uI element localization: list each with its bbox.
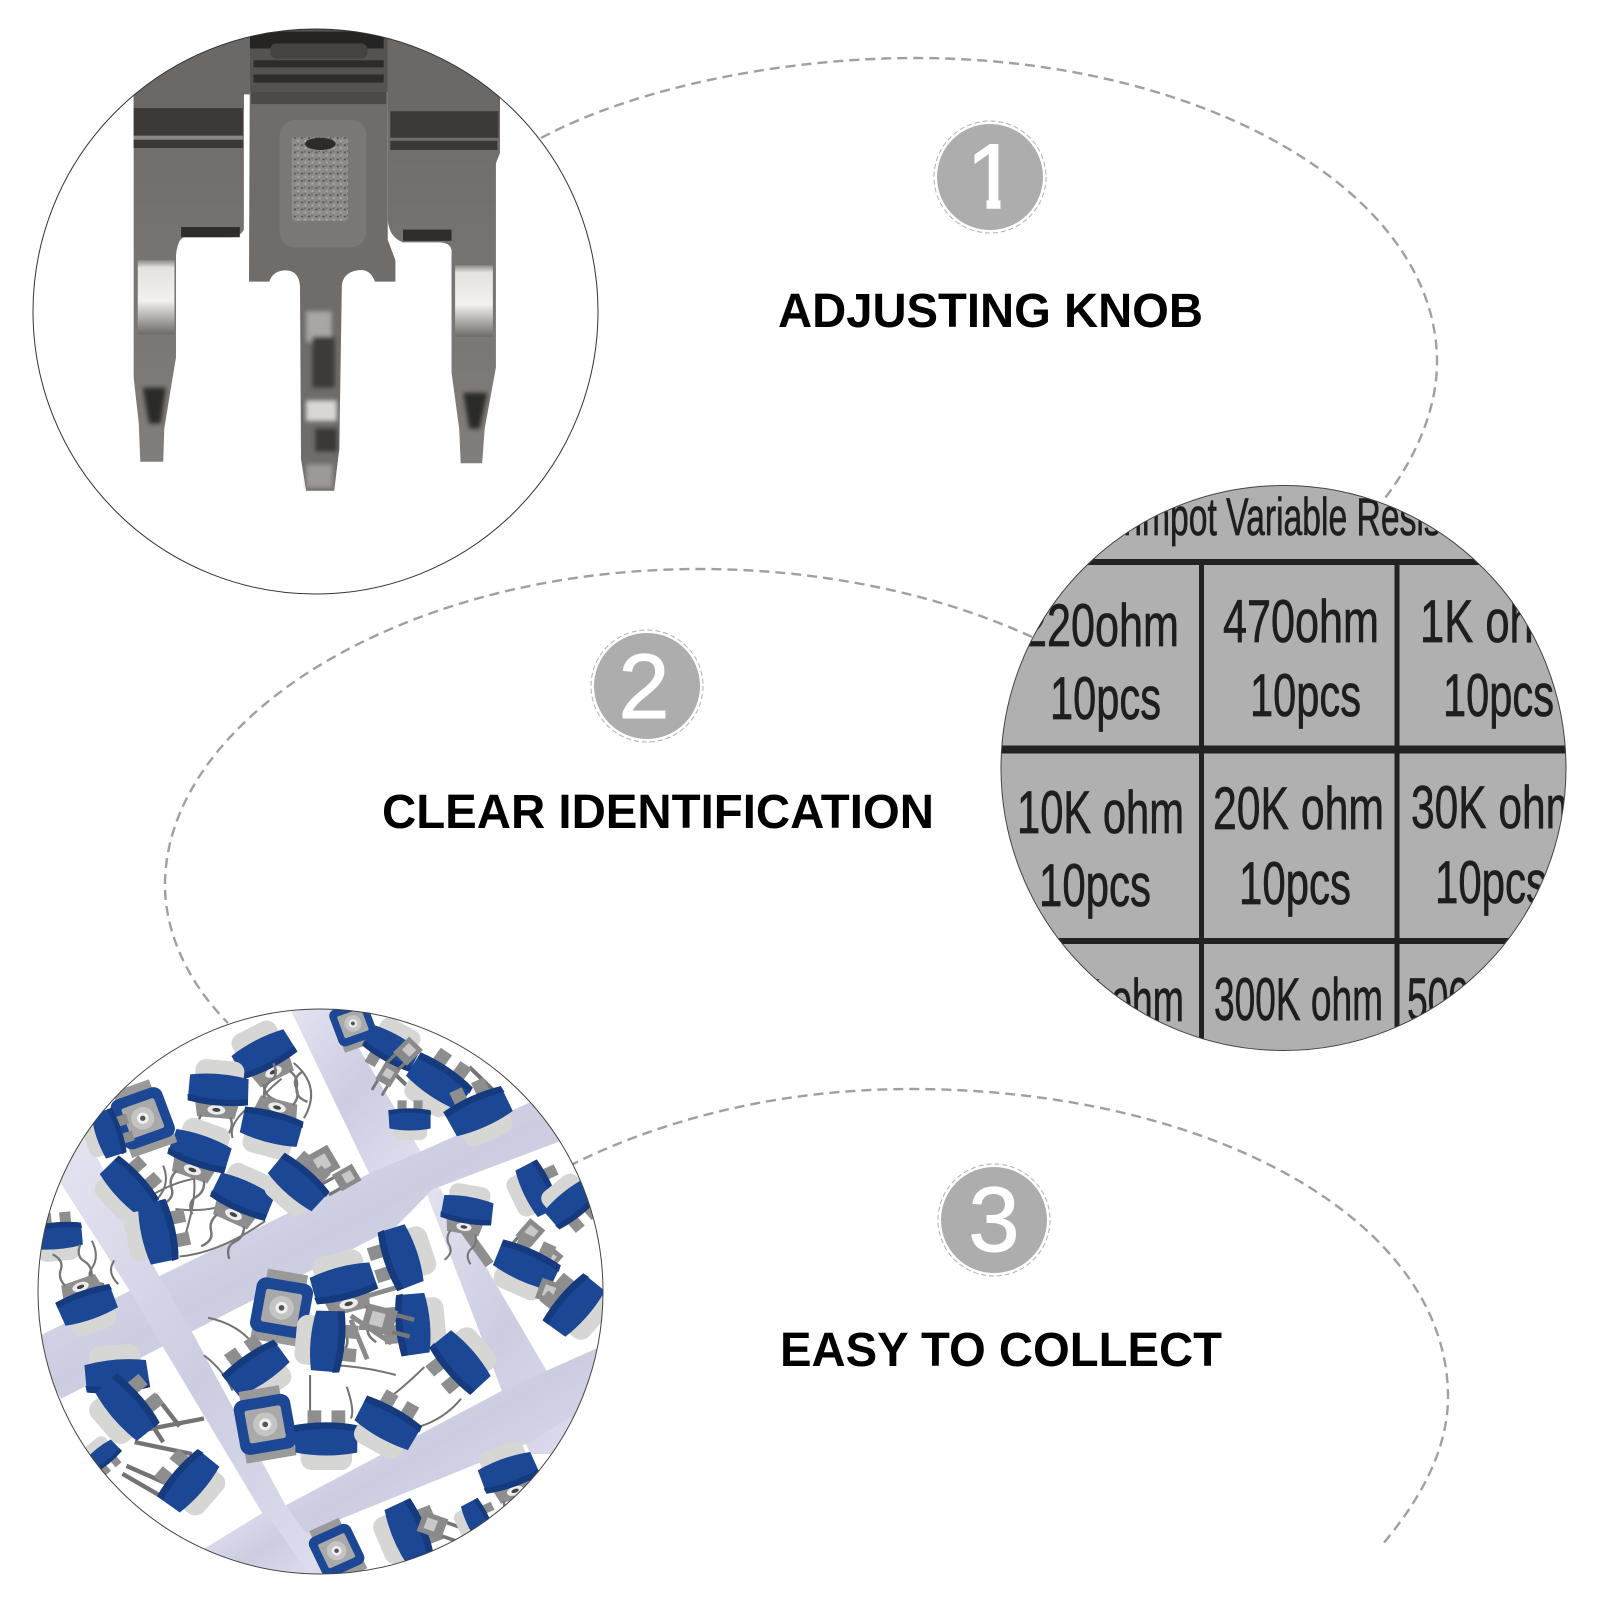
table text: 300K ohm <box>1214 966 1383 1033</box>
table text: 220ohm <box>1023 592 1179 659</box>
table text: 10pcs <box>1239 850 1351 917</box>
compartment: lower left trimmers <box>77 1343 234 1525</box>
badge 3: 3 <box>968 1169 1020 1271</box>
compartment: centre trimmers <box>213 1218 506 1470</box>
panel: collected trimmers photo circle <box>24 993 620 1588</box>
heading: easy to collect: EASY TO COLLECT <box>780 1324 1222 1377</box>
table grid lines <box>1000 562 1570 1060</box>
dashed connector: circle 1 to circle 2 <box>541 58 1437 502</box>
centre terminal <box>240 26 395 491</box>
table text: 470ohm <box>1223 588 1379 655</box>
lavender compartment dividers <box>42 1010 597 1574</box>
panel: identification table circle <box>1000 486 1581 1060</box>
table text: 10pcs <box>1435 849 1547 916</box>
badge 1 <box>934 121 1046 233</box>
left terminal <box>134 26 244 462</box>
right terminal <box>388 26 500 463</box>
table text: 10pcs <box>1443 662 1554 729</box>
compartment: bottom trimmers <box>303 1437 557 1586</box>
panel: adjusting knob photo circle <box>33 26 598 594</box>
badge 1: 1 <box>966 126 1018 228</box>
table text: 10K ohm <box>1017 779 1184 846</box>
compartment: top right trimmers <box>329 1010 513 1146</box>
compartment: top centre trimmers <box>78 1014 362 1269</box>
table text: 20K ohm <box>1213 775 1384 842</box>
table text <box>1013 488 1581 1034</box>
heading: adjusting knob: ADJUSTING KNOB <box>778 285 1203 338</box>
badge 3 <box>938 1164 1050 1276</box>
wires <box>89 1063 502 1497</box>
table text: 200K ohm <box>1013 967 1184 1034</box>
table text: 10pcs <box>1050 665 1161 732</box>
badge 2 <box>591 630 703 742</box>
badge 2: 2 <box>618 636 670 738</box>
compartment: left trimmers <box>40 1211 118 1336</box>
dashed connector: circle 3 to bottom right <box>569 1089 1448 1545</box>
dashed connector: circle 2 to circle 3 <box>165 569 1032 1023</box>
table text: 10pcs <box>1039 852 1151 919</box>
table text: 10pcs <box>1250 662 1361 729</box>
heading: clear identification: CLEAR IDENTIFICATION <box>382 786 934 839</box>
compartment: right trimmers <box>440 1160 602 1340</box>
